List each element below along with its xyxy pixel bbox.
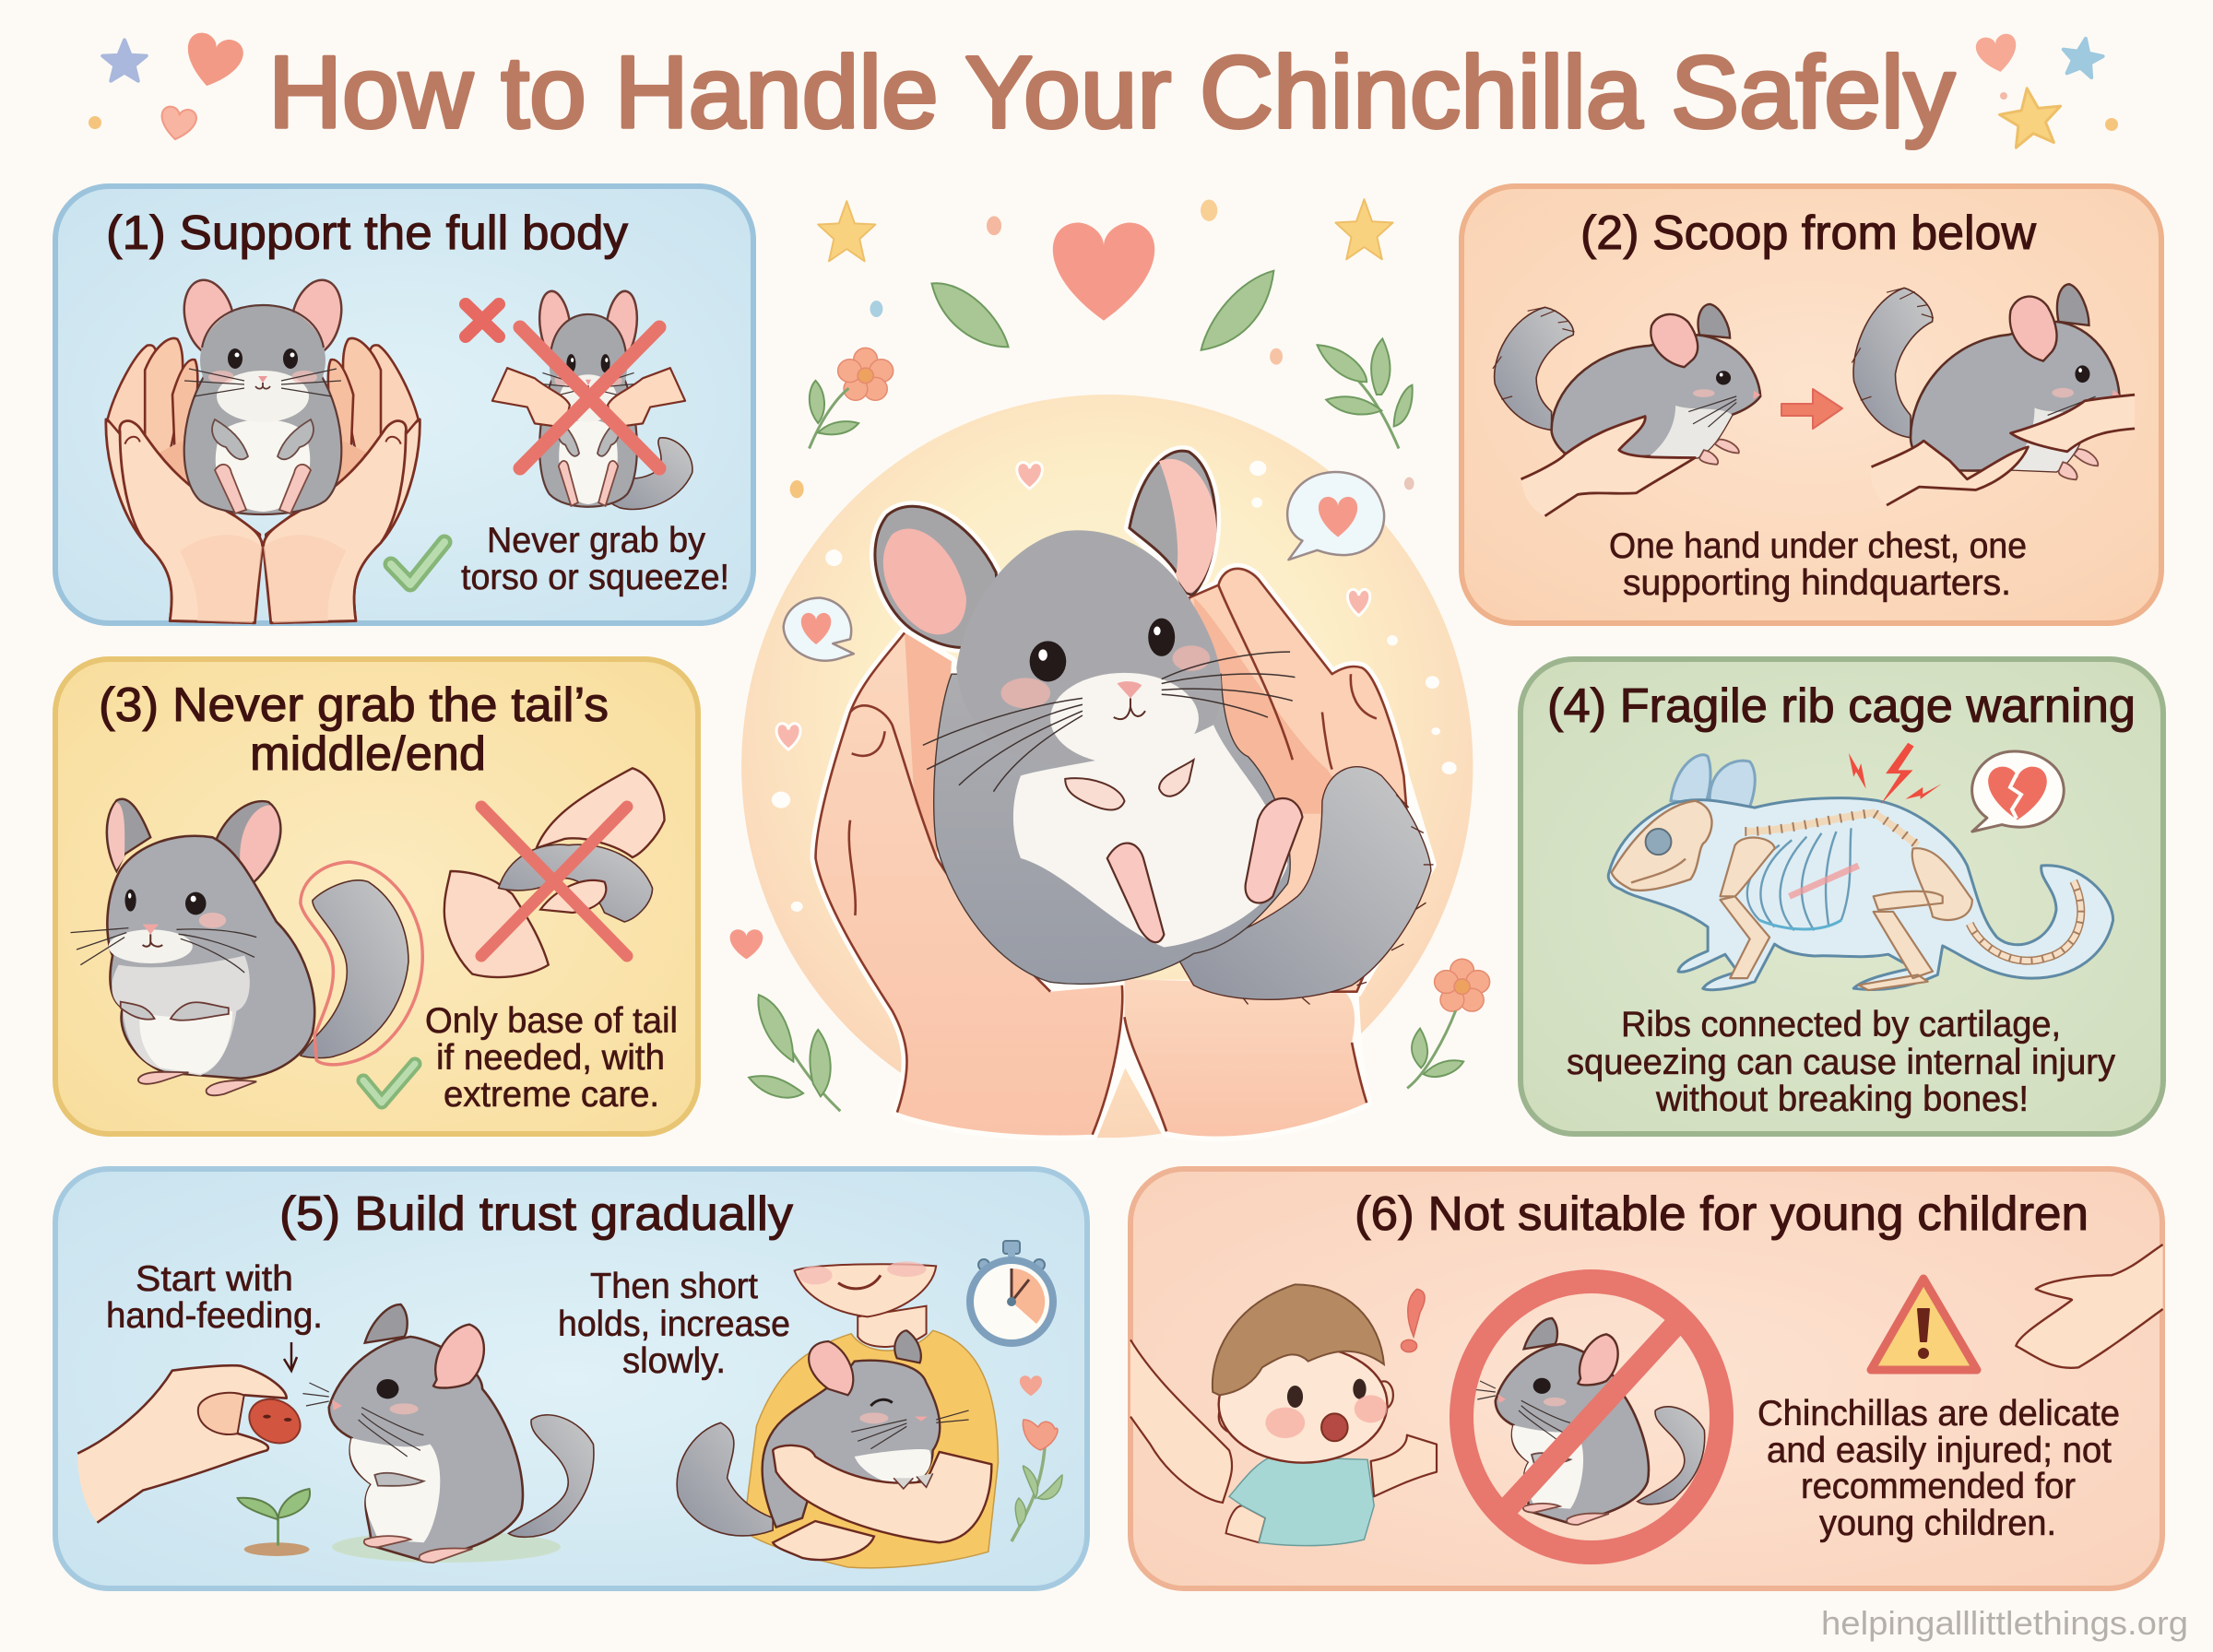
warning triangle	[1871, 1279, 1977, 1370]
panel 5 heading: (5) Build trust gradually	[279, 1187, 793, 1241]
text short holds: Then short	[590, 1267, 758, 1306]
text hand feeding	[106, 1259, 323, 1336]
hands grabbing tail crossed out	[444, 768, 665, 977]
open hand	[2016, 1245, 2163, 1368]
stopwatch	[970, 1241, 1053, 1343]
wrong hold illustration	[492, 287, 692, 509]
title: How to Handle Your Chinchilla Safely	[268, 36, 1955, 149]
child illustration	[1130, 1284, 1437, 1546]
panel 6 caption: and easily injured; not	[1767, 1431, 2112, 1470]
right hand	[1125, 569, 1411, 1137]
panel 2 caption: supporting hindquarters.	[1623, 563, 2011, 603]
panel 6 caption: Chinchillas are delicate	[1757, 1394, 2120, 1434]
text short holds: holds, increase	[558, 1304, 790, 1344]
sprout	[238, 1489, 310, 1556]
panel 3 heading: middle/end	[250, 727, 486, 781]
hand with treat	[77, 1365, 306, 1523]
left hand	[816, 632, 1122, 1136]
chinchilla being fed	[302, 1304, 594, 1563]
panel 4 caption: Ribs connected by cartilage,	[1621, 1005, 2061, 1044]
panel 2 heading: (2) Scoop from below	[1580, 206, 2036, 260]
arrow between steps	[1781, 389, 1842, 429]
panel 1 heading: (1) Support the full body	[106, 206, 628, 260]
small flower	[1012, 1420, 1062, 1541]
panel 4 caption: squeezing can cause internal injury	[1567, 1043, 2115, 1082]
panel 1 caption: Never grab by	[487, 521, 705, 560]
panel 6 caption	[1757, 1394, 2120, 1543]
panel 5: build trust gradually	[55, 1169, 1087, 1588]
floating hearts and bubbles	[772, 461, 1457, 912]
panel 3 caption: if needed, with	[436, 1038, 665, 1078]
panel 6 caption: recommended for	[1801, 1467, 2076, 1506]
panel 3 card	[55, 659, 698, 1134]
panel 6 heading: (6) Not suitable for young children	[1355, 1187, 2089, 1241]
chinchilla lifted first step	[1493, 304, 1760, 516]
panel 4 card	[1521, 659, 2163, 1134]
panel 3 caption: Only base of tail	[425, 1001, 678, 1041]
small heart	[1020, 1375, 1042, 1396]
skeleton illustration	[1608, 755, 2113, 990]
panel 1 caption	[461, 521, 729, 597]
panel 3 caption	[425, 1001, 678, 1115]
text short holds: slowly.	[622, 1341, 726, 1381]
footer website: helpingalllittlethings.org	[1821, 1604, 2188, 1642]
panel 3 heading	[99, 678, 609, 781]
broken heart bubble	[1972, 751, 2064, 832]
prohibited chinchilla	[1462, 1281, 1722, 1552]
panel 2 caption: One hand under chest, one	[1609, 526, 2027, 566]
chinchilla lifted second step	[1852, 284, 2135, 505]
panel 3 caption: extreme care.	[444, 1075, 659, 1115]
panel 1 caption: torso or squeeze!	[461, 558, 729, 597]
title decorations left	[89, 30, 246, 142]
text hand feeding: hand-feeding.	[106, 1296, 323, 1336]
green check mark	[363, 1064, 415, 1103]
text hand feeding: Start with	[136, 1259, 293, 1299]
watercolor glow	[741, 395, 1473, 1138]
panel 4 caption	[1567, 1005, 2115, 1119]
panel 2 caption	[1609, 526, 2027, 603]
panel 6 card	[1130, 1169, 2162, 1588]
small arrow to treat	[284, 1342, 297, 1371]
panel 4 caption: without breaking bones!	[1655, 1080, 2029, 1119]
panel 1 card	[55, 186, 753, 623]
panel 5 card	[55, 1169, 1087, 1588]
panel 1: support the full body	[55, 186, 753, 623]
fluffy tail	[1178, 767, 1434, 1004]
panel 4: fragile rib cage warning	[1521, 659, 2163, 1134]
white sticker halo	[816, 451, 1431, 1137]
central illustration: chinchilla in hands	[730, 199, 1490, 1138]
central chinchilla	[875, 451, 1302, 984]
panel 6 caption: young children.	[1819, 1504, 2056, 1543]
central decorations	[730, 199, 1490, 1111]
pain bolts	[1849, 743, 1942, 804]
panel 3: never grab the tail	[55, 659, 698, 1134]
red x mark	[466, 304, 499, 336]
title decorations right	[1974, 32, 2118, 149]
panel 2: scoop from below	[1462, 186, 2161, 623]
panel 2 card	[1462, 186, 2161, 623]
panel 4 heading: (4) Fragile rib cage warning	[1547, 679, 2136, 733]
text short holds	[558, 1267, 790, 1381]
green check mark	[391, 542, 444, 584]
panel 6: not suitable for young children	[1130, 1169, 2163, 1588]
sitting chinchilla with outlined tail	[71, 799, 422, 1095]
person holding chinchilla	[677, 1261, 998, 1568]
panel 3 heading: (3) Never grab the tail’s	[99, 678, 609, 732]
correct hold illustration	[106, 275, 420, 623]
